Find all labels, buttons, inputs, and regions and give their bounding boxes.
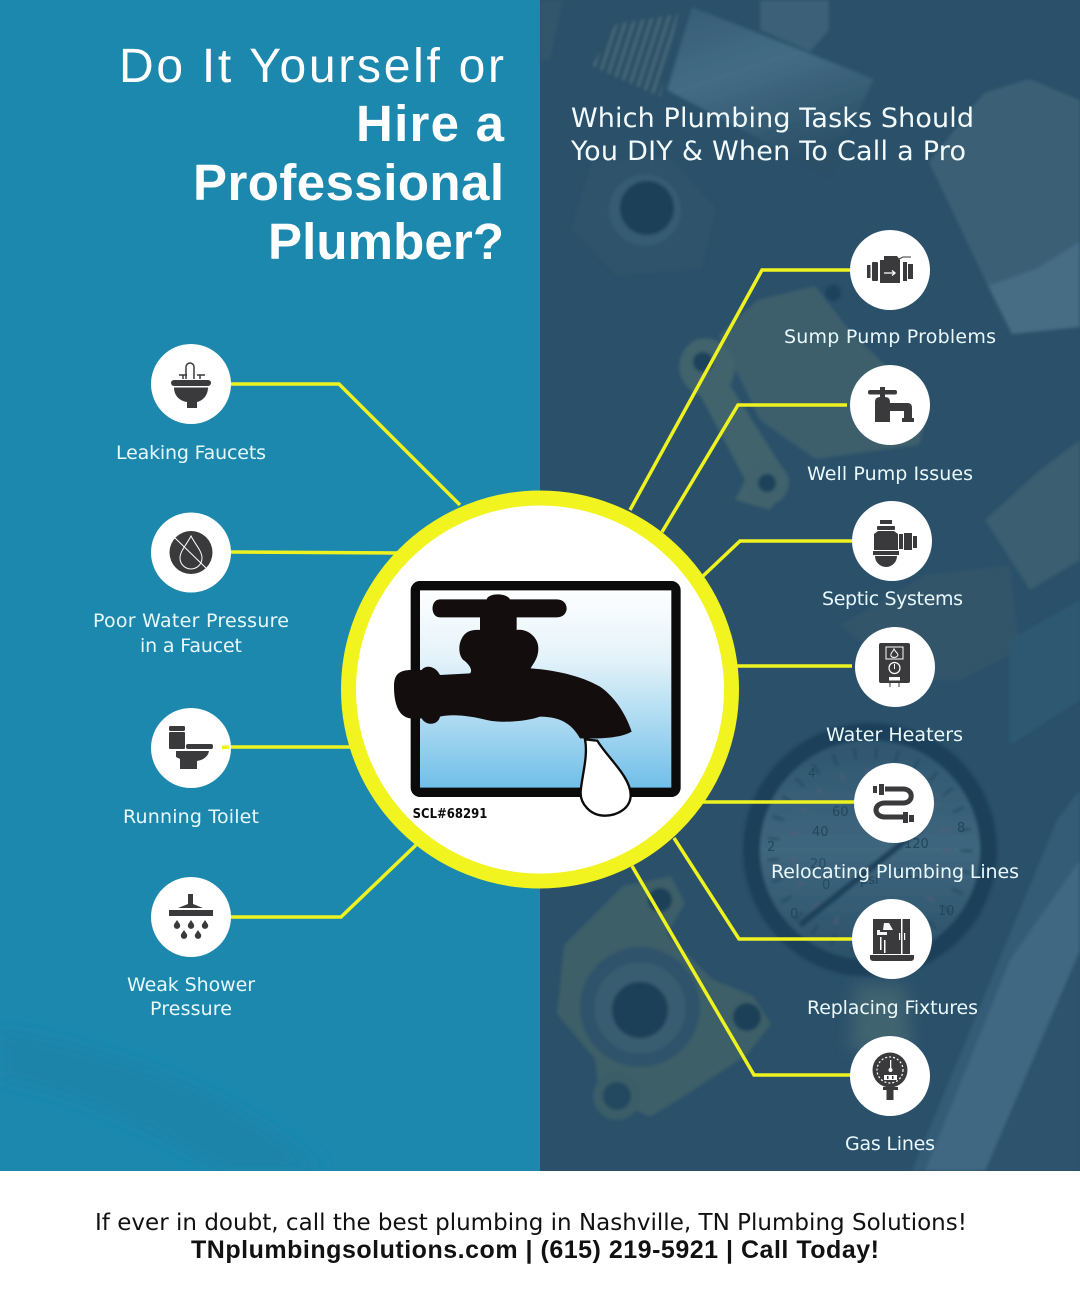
panel: left blue background <box>0 0 540 1171</box>
icon: spigot <box>868 387 914 422</box>
item: Water Heaters: Water Heaters <box>826 724 963 746</box>
panel: right photo background of plumbing fittings: 0 <box>822 878 830 893</box>
title: Do It Yourself or <box>119 40 504 93</box>
item: Running Toilet <box>123 708 259 828</box>
panel: right photo background of plumbing fittings: 2 <box>767 840 775 855</box>
item: Leaking Faucets: Leaking Faucets <box>116 442 266 464</box>
icon: septic tank <box>873 520 917 567</box>
panel: right photo background of plumbing fittings: 60 <box>832 805 849 820</box>
title <box>119 40 505 270</box>
panel: right photo background of plumbing fittings: 20 <box>810 857 827 872</box>
connector lines <box>222 270 858 1075</box>
icon: crossed water drop <box>170 531 212 574</box>
item: Weak Shower Pressure <box>127 877 255 1020</box>
item: Septic Systems: Septic Systems <box>822 588 963 610</box>
panel: right photo background of plumbing fittings <box>540 0 1080 1171</box>
item: Water Heaters <box>826 627 963 746</box>
icon: water heater <box>879 643 910 687</box>
item: Weak Shower Pressure: Pressure <box>150 998 232 1020</box>
item: Relocating Plumbing Lines <box>771 763 1019 883</box>
footer text: call to action: If ever in doubt, call the best plumbing in Nashville, TN Plumbing Solutions! <box>95 1210 967 1236</box>
item: Gas Lines: Gas Lines <box>845 1133 935 1155</box>
item: Relocating Plumbing Lines: Relocating Plumbing Lines <box>771 861 1019 883</box>
panel: right photo background of plumbing fittings: 0 <box>790 907 798 922</box>
panel: right photo background of plumbing fittings: 40 <box>812 825 829 840</box>
title: Hire a <box>356 95 505 152</box>
item: Leaking Faucets <box>116 344 266 464</box>
panel: right photo background of plumbing fittings: 140 <box>896 868 921 883</box>
icon: pressure gauge <box>872 1052 908 1100</box>
icon: sump pump <box>867 256 913 283</box>
panel: right photo background of plumbing fittings: 120 <box>904 837 929 852</box>
item: Well Pump Issues: Well Pump Issues <box>807 463 973 485</box>
item: Poor Water Pressure <box>93 512 289 657</box>
icon: shower cabin <box>870 919 914 961</box>
panel: right photo background of plumbing fittings: 4 <box>808 766 816 780</box>
item: Sump Pump Problems: Sump Pump Problems <box>784 326 996 348</box>
panel: right photo background of plumbing fittings: psi <box>860 873 879 888</box>
item: Sump Pump Problems <box>784 230 996 348</box>
item: Well Pump Issues <box>807 365 973 485</box>
icon: sink <box>171 363 211 408</box>
subtitle <box>570 103 974 167</box>
panel: right photo background of plumbing fittings: 10 <box>938 904 955 919</box>
item: Weak Shower Pressure: Weak Shower <box>127 974 255 996</box>
icon: flexible pipe <box>873 784 914 823</box>
central logo badge <box>348 498 732 881</box>
item: Poor Water Pressure: in a Faucet <box>140 635 242 657</box>
panel: footer <box>0 1171 1080 1300</box>
item: Poor Water Pressure: Poor Water Pressure <box>93 610 289 632</box>
icon: toilet <box>169 726 229 769</box>
logo: dripping faucet: SCL#68291 <box>413 807 487 822</box>
subtitle: You DIY & When To Call a Pro <box>570 136 966 167</box>
item: Gas Lines <box>845 1036 935 1155</box>
subtitle: Which Plumbing Tasks Should <box>571 103 974 134</box>
panel: right photo background of plumbing fittings: 8 <box>957 821 965 836</box>
item: Replacing Fixtures: Replacing Fixtures <box>807 997 978 1019</box>
item: Septic Systems <box>822 501 963 610</box>
item: Running Toilet: Running Toilet <box>123 806 259 828</box>
item: Replacing Fixtures <box>807 899 978 1019</box>
footer text: website and phone: TNplumbingsolutions.com | (615) 219-5921 | Call Today! <box>191 1236 879 1264</box>
logo: dripping faucet <box>394 586 676 822</box>
icon: shower head <box>169 894 213 939</box>
title: Professional <box>193 154 504 211</box>
title: Plumber? <box>268 213 504 270</box>
